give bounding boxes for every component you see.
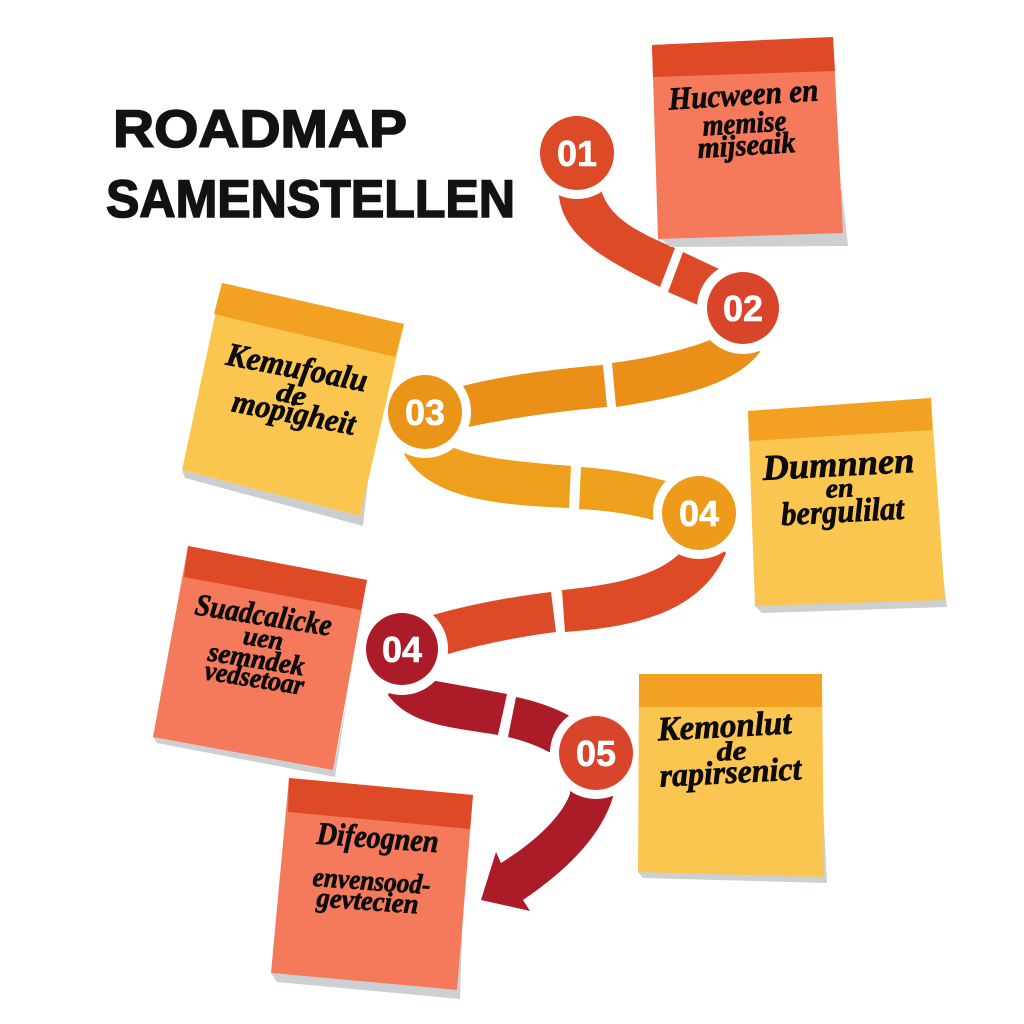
- note 6 text: [312, 815, 440, 921]
- note 3 text: [222, 337, 371, 442]
- arrow: final step to last note: [481, 785, 613, 911]
- ribbon: step 2 to 3: [445, 320, 760, 428]
- title: ROADMAP: [113, 100, 407, 159]
- title: SAMENSTELLEN: [106, 170, 515, 229]
- note 6 text: gevtecien: [315, 882, 420, 921]
- step marker 03: [379, 366, 471, 458]
- note 6 text: Difeognen: [315, 815, 440, 859]
- step marker 05: [550, 707, 642, 799]
- step marker 02: 02: [723, 288, 763, 329]
- step marker 05: 05: [576, 733, 616, 774]
- step marker 01: 01: [557, 133, 597, 174]
- step marker 04 orange: 04: [679, 493, 719, 534]
- note 1 text: mijseaik: [697, 126, 796, 165]
- note 4: yellow sticky note: [748, 398, 947, 613]
- title: [106, 100, 515, 229]
- step marker 04 orange: [653, 467, 745, 559]
- note 5 text: Kemonlut: [656, 704, 794, 749]
- red note text: uen: [241, 620, 286, 656]
- note 4 text: [760, 440, 915, 533]
- note 5: yellow sticky note: [638, 674, 827, 883]
- ribbon: step 1 to 2: [556, 182, 735, 315]
- red note text: vedsetoar: [203, 655, 307, 702]
- ribbon: step 4b to 5: [388, 675, 585, 755]
- ribbon: step 3 to 4: [404, 440, 680, 525]
- note 4 text: Dumnnen: [760, 440, 915, 488]
- note 6: red sticky note: [271, 778, 473, 999]
- step marker 02: [697, 262, 789, 354]
- step marker 03: 03: [405, 392, 445, 433]
- step marker 04 dark red: [356, 603, 448, 695]
- note 5 text: rapirsenict: [659, 751, 803, 795]
- red note text: semndek: [205, 637, 307, 683]
- note 5 text: [656, 704, 803, 795]
- note 1: red sticky note: [652, 37, 848, 247]
- step marker 01: [531, 107, 623, 199]
- note 3 text: de: [274, 377, 309, 412]
- note 4 text: en: [825, 472, 854, 504]
- note 6 text: envensood-: [312, 862, 432, 901]
- red note text: Suadcalicke: [193, 587, 335, 643]
- note 1 text: memise: [701, 104, 787, 143]
- note: red sticky note left: [153, 546, 367, 777]
- note 3 text: Kemufoalu: [222, 337, 371, 399]
- note 3 text: mopigheit: [229, 383, 360, 442]
- note 4 text: bergulilat: [780, 491, 906, 533]
- note 3: yellow sticky note: [182, 283, 404, 526]
- ribbon: step 4 to 4b: [420, 540, 726, 656]
- note 5 text: de: [716, 735, 747, 767]
- step marker 04 dark red: 04: [382, 629, 422, 670]
- note 1 text: [666, 71, 819, 165]
- red note text: [193, 587, 335, 702]
- note 1 text: Hucween en: [666, 71, 819, 117]
